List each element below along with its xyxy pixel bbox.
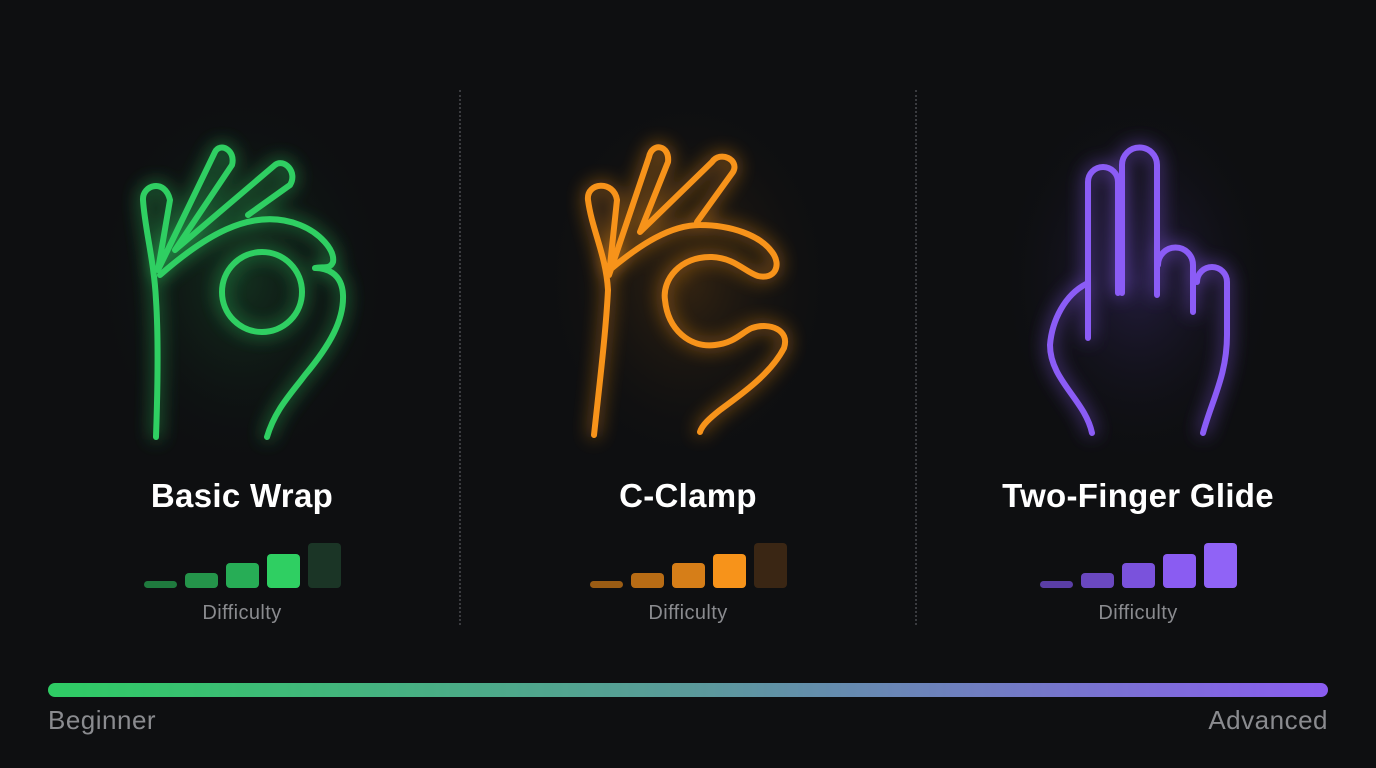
title: Basic Wrap: Basic Wrap xyxy=(151,477,333,514)
difficulty bars: purple xyxy=(1040,543,1237,588)
label: Beginner: Beginner xyxy=(48,705,156,735)
progression gradient bar xyxy=(48,683,1328,697)
difficulty bars: orange xyxy=(590,543,787,588)
divider xyxy=(459,90,461,625)
title: C-Clamp: C-Clamp xyxy=(619,477,757,514)
label: Difficulty: Difficulty xyxy=(202,602,282,624)
icon: purple two-finger hand xyxy=(1050,148,1227,433)
difficulty bars: green xyxy=(144,543,341,588)
label: Difficulty: Difficulty xyxy=(648,602,728,624)
icon: orange C-clamp hand xyxy=(588,147,785,435)
title: Two-Finger Glide: Two-Finger Glide xyxy=(1002,477,1274,514)
label: Difficulty: Difficulty xyxy=(1098,602,1178,624)
divider xyxy=(915,90,917,625)
label: Advanced: Advanced xyxy=(1208,705,1328,735)
icon: green OK hand xyxy=(143,148,343,437)
